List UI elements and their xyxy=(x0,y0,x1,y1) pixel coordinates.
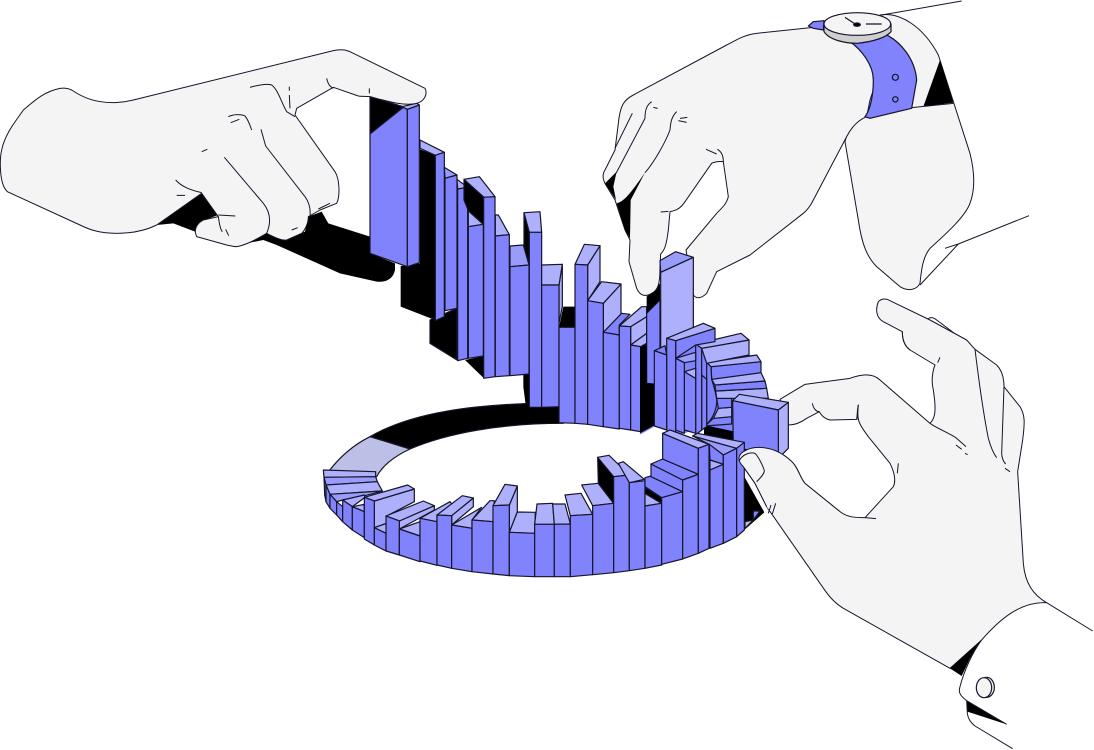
lower right hand with shirt cuff xyxy=(739,299,1093,749)
bar 15 xyxy=(619,307,647,430)
large front bar beside the index finger xyxy=(733,394,788,458)
bar 3 xyxy=(444,167,457,311)
bar 9 tall xyxy=(524,212,542,407)
spiral of bars on the right side xyxy=(640,323,768,442)
tall bar purple face under finger xyxy=(647,283,660,385)
bar 10 xyxy=(542,264,562,407)
bar 13 xyxy=(588,282,621,427)
bar 5 xyxy=(468,211,483,358)
shirt cuff xyxy=(950,603,1093,749)
bar 7 xyxy=(495,215,509,377)
bar 4 xyxy=(457,179,468,361)
bar 16 xyxy=(631,333,647,432)
rising bar series: back of the chart xyxy=(401,140,660,432)
ring base: black and pale floor of the circular chart xyxy=(329,403,563,477)
left hand pinching bar xyxy=(0,50,426,247)
bar 11 xyxy=(559,327,575,423)
thumbnail xyxy=(739,453,764,482)
top right hand with fingers xyxy=(603,27,890,298)
bar 8 xyxy=(510,245,529,376)
strap holes xyxy=(892,74,898,102)
watch strap xyxy=(808,13,917,118)
thumb pressing the front bar xyxy=(739,447,840,543)
watch face xyxy=(824,13,891,43)
top right arm and sleeve xyxy=(845,1,1029,290)
tall pale bar under the index finger xyxy=(660,252,693,353)
cufflink xyxy=(976,677,994,698)
bar 14 xyxy=(603,313,630,429)
held bar at top left xyxy=(370,97,419,267)
bar 2 xyxy=(420,140,444,321)
front bars of the circular chart xyxy=(323,430,764,577)
bar 12 xyxy=(575,244,600,424)
top-left hand shadow xyxy=(157,193,395,282)
bar 6 tall xyxy=(464,177,495,378)
